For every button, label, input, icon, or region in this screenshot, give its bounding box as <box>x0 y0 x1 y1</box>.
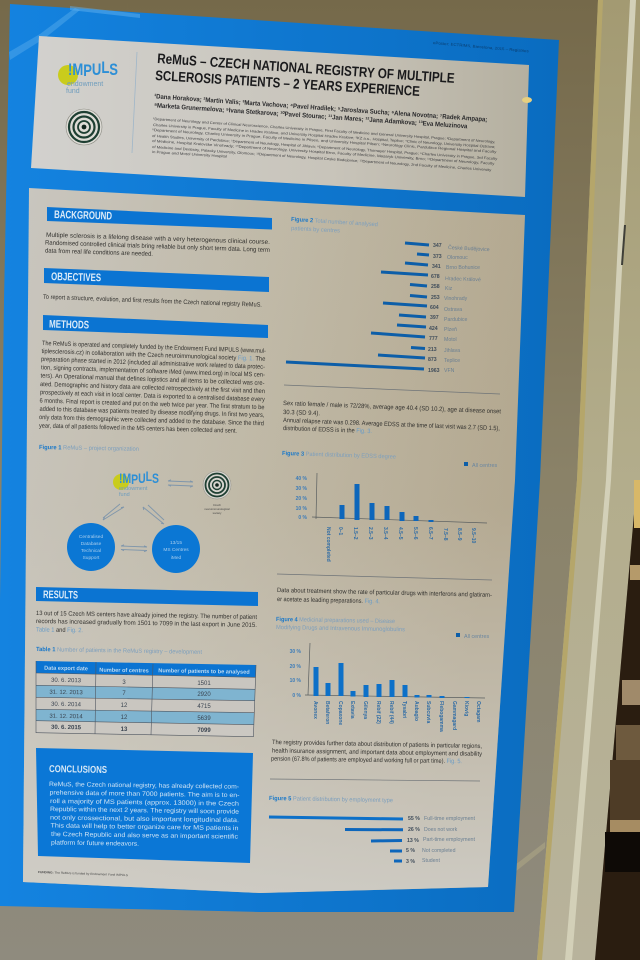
section: background: BACKGROUND <box>54 209 112 223</box>
logo: IMPULS endowment fund: fund <box>66 88 80 95</box>
bar labels: Hradec Králové <box>445 276 481 283</box>
y axis labels: 30 % <box>290 649 302 655</box>
light glare on poster <box>522 97 532 103</box>
figure 5: employment <box>269 796 476 865</box>
circle: centralised database: Centralised <box>79 534 103 540</box>
divider <box>270 779 480 781</box>
methods text: ters). An Operational manual that defines logistics and all items to be collected was cre- <box>40 373 265 387</box>
conclusions text: roll a majority of MS patients (approx. 13000) in the Czech <box>50 798 240 808</box>
bar labels <box>422 816 476 864</box>
figure 3: EDSS distribution <box>282 451 497 562</box>
conclusions text: This data will help to better organize care for MS patients in <box>50 823 239 832</box>
bar values: 777 <box>429 336 438 342</box>
society seal: neuroimmunological <box>204 507 230 511</box>
demographics text: distribution of EDSS is in the Fig. 3. <box>283 425 372 435</box>
results text: records has increased gradually from 1501 to 7099 in the last export in June 2015. <box>36 618 257 629</box>
table 1: 31. 12. 2013 <box>49 690 83 696</box>
x axis labels: Betaferon <box>324 701 330 724</box>
header panel <box>31 36 529 197</box>
bar labels: Jihlava <box>444 348 460 354</box>
table 1: Data export date <box>44 666 88 672</box>
table 1 caption: Table 1 Number of patients in the ReMuS registry – development <box>36 647 202 656</box>
registry text: health insurance assignment, and important data about employment and disability <box>272 748 483 758</box>
x axis labels: Extavia <box>349 701 355 719</box>
methods text: tiplesclerosis.cz) in collaboration with the Czech neuroimmunological society Fig. 1. The <box>41 348 266 363</box>
conclusions text: the Czech Republic and also serve as an important scientific <box>51 831 239 841</box>
society seal: society <box>213 511 222 515</box>
x axis labels: 0–1 <box>337 527 343 536</box>
section: background <box>45 207 272 258</box>
methods text: preparation phase started in 2012 (included all administrative work related to data protec- <box>41 356 265 371</box>
impulse logo: fund <box>119 492 130 498</box>
affiliations: of Medicine, Hospital Kralovske Vinohrady; ¹⁰Department of Neurology, University Hospital Brno, Faculty of Medicine, Masaryk University, Brno; ¹¹Department of Neurology, Faculty <box>152 139 495 166</box>
y axis labels: 20 % <box>290 664 302 670</box>
x axis labels: 3.5–4 <box>382 527 388 540</box>
authors: ⁸Marketa Grunermelova; ⁹Ivana Stetkarova; ¹⁰Pavel Stourac; ¹¹Jan Mares; ¹²Jana Adamkova; ¹³Eva Meluzinova <box>154 101 468 130</box>
y axis labels: 0 % <box>298 515 308 521</box>
legend: All centres <box>464 634 489 640</box>
table 1: 1501 <box>197 681 211 687</box>
table 1: 13 <box>121 727 128 733</box>
affiliations: of Medicine and Dentistry, Palacky University, Olomouc; ¹²Department of Neurology, Hospital Ceske Budejovice; ¹³Department of Neurology, 2nd Faculty of Medicine, Charles University <box>152 145 492 172</box>
table 1: 30. 6. 2015 <box>51 725 82 731</box>
table 1: 7 <box>122 691 126 697</box>
figure 2 caption: patients by centres <box>291 226 340 235</box>
bar values: 1963 <box>428 368 440 374</box>
x axis labels: 1.5–2 <box>352 527 358 540</box>
bar values: 5 % <box>406 848 415 854</box>
affiliations: in Prague and Motol University Hospital <box>152 150 227 159</box>
circle: centralised database: Support <box>83 555 100 561</box>
bar values: 678 <box>431 274 440 280</box>
legend <box>464 462 497 469</box>
x axis labels: Gilenya <box>362 701 368 719</box>
bar labels: Full-time employment <box>424 816 476 822</box>
conclusions text: prehensive data of more than 7000 patients. The aim is to en- <box>49 790 240 799</box>
arrows: between organisations <box>103 480 193 552</box>
figure 2 caption <box>291 217 378 235</box>
methods heading bar <box>43 315 268 338</box>
bar values: 873 <box>428 357 437 363</box>
x axis labels: Octagam <box>475 701 481 723</box>
table 1: 12 <box>121 715 128 721</box>
bar values: 341 <box>432 264 441 270</box>
bar labels: Teplice <box>444 358 460 364</box>
section: results <box>36 587 258 737</box>
x axis labels: 7.5–8 <box>442 528 448 541</box>
x axis labels: Flebogamma <box>438 701 444 732</box>
door frame <box>537 0 640 960</box>
main content panel <box>23 188 525 893</box>
affiliations <box>152 117 498 172</box>
demographics text: Annual relapse rate was 0.298. Average EDSS at the time of last visit was 2.7 (SD 1.5), <box>283 417 500 432</box>
table 1: 4715 <box>197 704 211 710</box>
circle: MS centres: MS Centres <box>163 547 189 553</box>
table 1: Number of patients to be analysed <box>158 668 250 676</box>
bar labels: Plzeň <box>444 327 457 333</box>
legend <box>456 633 489 640</box>
x axis labels: Subcuvia <box>425 701 431 723</box>
methods text: prospectively at each visit in local center. Data is exported to a centralised database every <box>40 389 266 403</box>
tape strip on wall <box>515 842 545 872</box>
bar labels: Vinohrady <box>444 296 468 302</box>
bar labels: Does not work <box>424 827 458 833</box>
x axis labels: Not completed <box>325 527 331 562</box>
demographics text: Sex ratio female / male is 72/28%, average age 40.4 (SD 10.2), age at disease onset <box>283 400 501 415</box>
bar values: 3 % <box>406 859 415 865</box>
x axis labels: Aubagio <box>413 701 419 721</box>
conclusions heading: CONCLUSIONS <box>49 764 107 776</box>
x axis labels: 4.5–5 <box>397 527 403 540</box>
bar labels: Pardubice <box>444 317 467 323</box>
x axis labels: 5.5–6 <box>412 527 418 540</box>
bar labels: Part-time employment <box>423 837 476 843</box>
affiliations: of Health Studies, University of Pardubice; ⁷Department of Neurology, Hospital of Jihlava; ⁸Department of Neurology, Thomayer Hospital, Prague; ⁹Charles University in Prague, 3rd Faculty <box>152 134 498 161</box>
circle: MS centres: iMed <box>171 555 182 561</box>
bar labels <box>444 244 490 374</box>
treatment text: Data about treatment show the rate of particular drugs with interferons and glatiram- <box>277 587 492 599</box>
logo: IMPULS endowment fund: endowment <box>67 81 103 88</box>
y axis labels <box>296 476 308 521</box>
methods text: tion, signing contracts, implementation of software iMed (www.imed.org) in local MS cen- <box>41 364 265 379</box>
legend: All centres <box>472 463 497 469</box>
logo: IMPULS endowment fund: !M <box>68 60 88 79</box>
table 1: 3 <box>122 680 126 686</box>
x axis labels: Rebif (22) <box>375 701 381 724</box>
top corner label: ePoster: ECTRIMS, Barcelona, 2015 – Registries <box>433 41 529 53</box>
x axis labels <box>312 701 481 732</box>
table 1: 31. 12. 2014 <box>49 714 83 720</box>
background heading bar <box>47 207 272 230</box>
table 1: 2920 <box>197 692 211 698</box>
background text: Randomised controlled clinical trials bring reliable but only short term data. Long term <box>45 240 270 254</box>
impulse logo <box>113 468 159 498</box>
table 1: Number of centres <box>99 668 149 674</box>
x axis labels: Rebif (44) <box>388 701 394 724</box>
bar values: 13 % <box>407 838 419 844</box>
table 1: 7099 <box>197 728 211 734</box>
horizontal bars <box>269 817 403 861</box>
bar values: 253 <box>431 295 440 301</box>
logo: IMPULS endowment fund: S <box>109 60 118 79</box>
table 1: 30. 6. 2013 <box>51 678 82 684</box>
divider <box>284 385 500 394</box>
y axis labels: 30 % <box>296 486 308 492</box>
conclusions text <box>49 781 240 848</box>
table 1 <box>36 661 256 737</box>
poster title <box>155 50 455 99</box>
logo: IMPULS endowment fund: P <box>83 61 92 80</box>
methods text: added to this database was patients treated by disease modifying drugs. In first two years, <box>39 406 265 419</box>
bar values: 213 <box>428 347 437 353</box>
section: methods <box>39 315 268 435</box>
impulse logo: L <box>146 468 152 484</box>
table 1: 30. 6. 2014 <box>51 702 82 708</box>
section: conclusions box <box>36 748 253 863</box>
header divider <box>132 52 137 153</box>
x axis labels: Avonex <box>312 701 318 719</box>
registry text: The registry provides further data about distribution of patients in particular regions, <box>272 739 482 750</box>
background room through the doorway <box>595 480 640 960</box>
circle: centralised database <box>67 523 115 571</box>
methods text: The ReMuS is operated and completely funded by the Endowment Fund IMPULS (www.mul- <box>42 340 266 355</box>
figure 5 caption: Figure 5 Patient distribution by employment type <box>269 796 394 804</box>
figure 3 caption: Figure 3 Patient distribution by EDSS degree <box>282 451 397 461</box>
x axis labels: 2.5–3 <box>367 527 373 540</box>
logo: IMPULS endowment fund: U <box>92 60 101 79</box>
results heading bar <box>36 587 258 606</box>
x axis labels: Tysabri <box>401 701 407 719</box>
bar values <box>428 243 442 374</box>
methods text: only data from this demographic were collected and added to the database. Since the third <box>39 414 264 427</box>
affiliations: ⁵Department of Neurology, Charles University in Prague, Faculty of Medicine in Pilsen, and University Hospital Pilsen; ⁶Neurology Clinic, Pardubice Regional Hospital and Faculty <box>152 128 497 154</box>
conclusions text: Republic within the next 2 years. The registry will soon provide <box>50 806 240 816</box>
bar labels: Kiz <box>445 286 453 292</box>
background text: Multiple sclerosis is a lifelong disease with a very heterogenous clinical course. <box>46 232 270 246</box>
methods text: 6 months. Final report is created and put on the web twice per year. The first stratum to be <box>39 398 265 411</box>
y axis labels: 10 % <box>296 506 308 512</box>
results text: 13 out of 15 Czech MS centers have already joined the registry. The number of patient <box>36 610 257 621</box>
impulse logo: !M <box>119 470 135 486</box>
objectives heading bar <box>44 268 269 292</box>
registry text: pension (67.8% of patients are employed and working full or part time). Fig. 5. <box>271 756 462 765</box>
bar values: 55 % <box>408 816 420 822</box>
impulse logo: P <box>131 471 138 487</box>
figure 4 caption: Modifying Drugs and Intravenous Immunoglobulins <box>276 625 405 633</box>
society seal: Czech <box>213 503 221 507</box>
bar labels: VFN <box>444 368 455 374</box>
bar values: 424 <box>429 326 438 332</box>
x axis labels <box>325 527 476 562</box>
y axis labels: 40 % <box>296 476 308 482</box>
treatment text: er acetate as leading preparations. Fig. 4. <box>277 596 380 605</box>
bar values: 397 <box>430 315 439 321</box>
y axis labels <box>290 649 302 699</box>
section: methods: METHODS <box>49 319 89 332</box>
results text: Table 1 and Fig. 2. <box>36 627 83 634</box>
methods text: year, data of all patients followed in the MS centers has been collected and sent. <box>39 423 237 435</box>
figure 4 caption: Figure 4 Medicinal preparations used – Disease <box>276 617 396 625</box>
figure 2: patients by centre <box>286 217 490 374</box>
conclusions text: platform for future endeavors. <box>51 840 139 848</box>
society seal <box>203 471 231 515</box>
x axis labels: 9.5–10 <box>470 528 476 544</box>
y axis labels: 0 % <box>292 693 302 699</box>
logo: IMPULS endowment fund: L <box>101 58 109 77</box>
bar values: 258 <box>431 284 440 290</box>
bar values: 26 % <box>408 827 420 833</box>
bar labels: Brno Bohunice <box>446 265 480 271</box>
bar labels: České Budějovice <box>448 244 490 253</box>
bar values: 604 <box>430 305 439 311</box>
impulse logo: endowment <box>119 486 148 492</box>
conclusions text: not only crossectional, but also important longitudinal data. <box>50 815 239 824</box>
affiliations: ¹Department of Neurology and Center of Clinical Neuroscience, Charles University in Prague, First Faculty of Medicine and General University Hospital, Prague; ²Department of Neurology, <box>153 117 495 144</box>
section: objectives: OBJECTIVES <box>51 271 101 284</box>
columns <box>314 663 470 698</box>
registry text <box>271 739 483 765</box>
logo: neuroimmunological society seal <box>66 109 102 145</box>
bar labels: Ostrava <box>444 307 462 313</box>
axes <box>312 473 487 523</box>
background text: data from real life conditions are needed. <box>45 248 153 258</box>
divider <box>277 574 492 580</box>
impulse logo: U <box>138 470 146 486</box>
poster title: ReMuS – CZECH NATIONAL REGISTRY OF MULTIPLE <box>157 50 455 86</box>
impulse logo: S <box>152 470 159 486</box>
bar values: 373 <box>433 254 442 260</box>
affiliations: Charles University in Prague, Faculty of Medicine in Hradec Kralove, and University Hospital Hradec Kralove; ³KZ a.s., Hospital, Teplice; ⁴Clinic of Neurology, University Hospital Ostrava; <box>153 123 495 149</box>
y axis labels: 10 % <box>290 678 302 684</box>
conclusions text: ReMuS, the Czech national registry, has already collected com- <box>49 781 239 791</box>
x axis labels: 8.5–9 <box>456 528 462 541</box>
background text <box>45 232 270 258</box>
bar labels: Motol <box>444 337 457 343</box>
circle: centralised database: Technical <box>81 548 101 554</box>
x axis labels: Gammagard <box>451 701 457 730</box>
poster title: SCLEROSIS PATIENTS – 2 YEARS EXPERIENCE <box>155 67 420 99</box>
figure 2 caption: Figure 2 Total number of analysed <box>291 217 378 228</box>
bar values <box>406 816 420 865</box>
horizontal bars <box>286 243 429 369</box>
x axis labels: Kiovig <box>463 701 469 716</box>
table 1: 12 <box>121 703 128 709</box>
methods text <box>39 340 266 435</box>
circle: MS centres <box>152 525 200 573</box>
authors: ¹Dana Horakova; ²Martin Valis; ³Marta Vachova; ⁴Pavel Hradilek; ⁵Jaroslava Sucha; ⁶Alena Novotna; ⁷Radek Ampapa; <box>154 93 488 124</box>
y axis labels: 20 % <box>296 496 308 502</box>
circle: MS centres: 13/15 <box>170 540 182 546</box>
bar values: 347 <box>433 243 442 249</box>
demographics text: 30.3 (SD 9.4). <box>283 409 320 417</box>
table 1: 5639 <box>197 716 211 722</box>
funding note: FUNDING: The ReMuS is funded by Endowment Fund IMPULS <box>38 870 128 877</box>
section: objectives <box>43 268 269 309</box>
x axis labels: 6.5–7 <box>427 527 433 540</box>
figure 4 caption <box>276 617 405 633</box>
objectives text: To report a structure, evolution, and first results from the Czech national registry ReMuS. <box>43 294 262 309</box>
demographics text <box>283 400 501 435</box>
logo: IMPULS endowment fund <box>58 58 118 95</box>
bar labels: Olomouc <box>447 255 468 261</box>
section: results: RESULTS <box>43 589 78 602</box>
treatment text <box>277 587 492 605</box>
circle: centralised database: Database <box>81 541 102 547</box>
x axis labels: Copaxone <box>337 701 343 725</box>
results text <box>36 610 257 634</box>
bar labels: Student <box>422 858 440 864</box>
methods text: ated. Demographic and history data are collected retrospectively at the first visit and then <box>40 381 265 395</box>
figure 1 caption: Figure 1 ReMuS – project organization <box>39 445 139 453</box>
axes <box>305 643 485 698</box>
figure 4: medicinal preparations <box>276 617 489 732</box>
bar labels: Not completed <box>422 848 456 854</box>
columns <box>340 484 434 522</box>
figure 1: project organisation <box>39 445 231 573</box>
